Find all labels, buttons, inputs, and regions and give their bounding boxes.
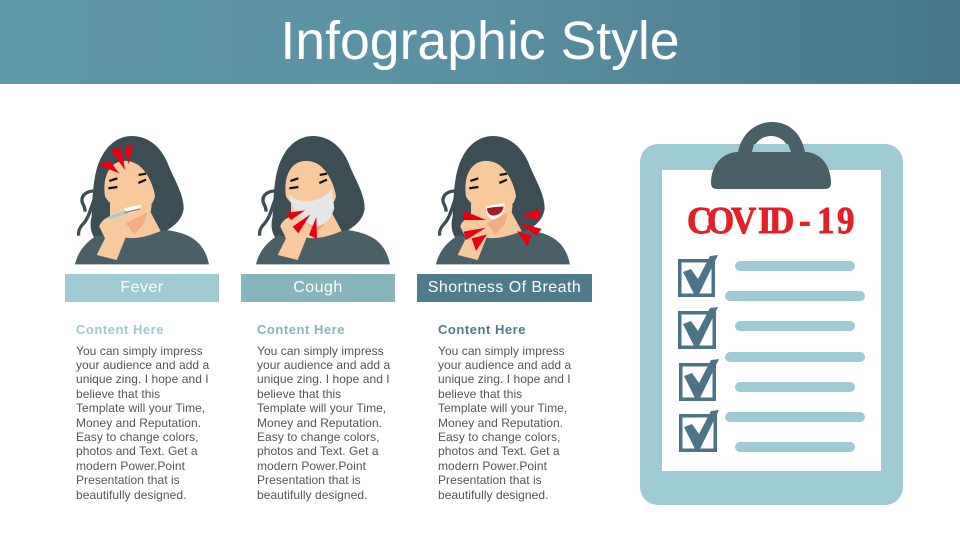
body text: photos and Text. Get a	[76, 444, 198, 458]
icon: clipboard	[640, 122, 903, 505]
text column: cough	[257, 322, 390, 502]
clipboard paper	[662, 170, 881, 471]
body text: beautifully designed.	[438, 488, 548, 502]
body text: Presentation that is	[438, 473, 542, 487]
body text: Template will your Time,	[438, 401, 567, 415]
illustration: shortness of breath woman	[436, 136, 570, 264]
checkbox 4	[681, 410, 719, 450]
body text: Template will your Time,	[76, 401, 205, 415]
body text: Money and Reputation.	[76, 416, 201, 430]
body text: believe that this	[257, 387, 341, 401]
illustration: fever woman	[75, 136, 209, 264]
body text: You can simply impress	[76, 344, 203, 358]
body text: unique zing. I hope and I	[257, 372, 390, 386]
body text: beautifully designed.	[257, 488, 367, 502]
body text: believe that this	[76, 387, 160, 401]
subheading: Content Here	[257, 322, 345, 337]
body text: unique zing. I hope and I	[76, 372, 209, 386]
body text: your audience and add a	[257, 358, 390, 372]
body text: believe that this	[438, 387, 522, 401]
body text: photos and Text. Get a	[257, 444, 379, 458]
subheading: Content Here	[438, 322, 526, 337]
body text: Easy to change colors,	[257, 430, 380, 444]
checklist lines	[725, 261, 865, 452]
body text: Money and Reputation.	[257, 416, 382, 430]
body text: Presentation that is	[76, 473, 180, 487]
body text: You can simply impress	[257, 344, 384, 358]
checkbox 1	[680, 255, 718, 295]
subheading: Content Here	[76, 322, 164, 337]
text column: shortness of breath	[438, 322, 572, 502]
body text: your audience and add a	[76, 358, 209, 372]
body text: modern Power.Point	[76, 459, 185, 473]
label bar: cough	[241, 274, 395, 302]
body text: your audience and add a	[438, 358, 571, 372]
body text: photos and Text. Get a	[438, 444, 560, 458]
body text: Easy to change colors,	[76, 430, 199, 444]
header banner	[0, 0, 960, 84]
body text	[76, 344, 210, 502]
body text: Presentation that is	[257, 473, 361, 487]
label bar: fever: Fever	[120, 279, 164, 296]
body text: beautifully designed.	[76, 488, 186, 502]
label bar: shortness of breath	[417, 274, 592, 302]
label bar: fever	[65, 274, 219, 302]
covid-19 heading: COVID-19	[687, 199, 854, 241]
label bar: cough: Cough	[293, 279, 343, 296]
clipboard clip	[711, 122, 831, 189]
body text: Easy to change colors,	[438, 430, 561, 444]
body text: modern Power.Point	[438, 459, 547, 473]
text column: fever	[76, 322, 210, 502]
checkbox 2	[680, 307, 718, 347]
title: Infographic Style	[280, 11, 680, 71]
body text: You can simply impress	[438, 344, 565, 358]
body text	[438, 344, 572, 502]
checkbox 3	[681, 359, 719, 399]
body text: Template will your Time,	[257, 401, 386, 415]
label bar: shortness of breath: Shortness Of Breath	[428, 279, 581, 296]
body text	[257, 344, 390, 502]
body text: modern Power.Point	[257, 459, 366, 473]
illustration: cough woman with mask	[256, 136, 390, 264]
body text: unique zing. I hope and I	[438, 372, 571, 386]
body text: Money and Reputation.	[438, 416, 563, 430]
clipboard board	[640, 144, 903, 505]
